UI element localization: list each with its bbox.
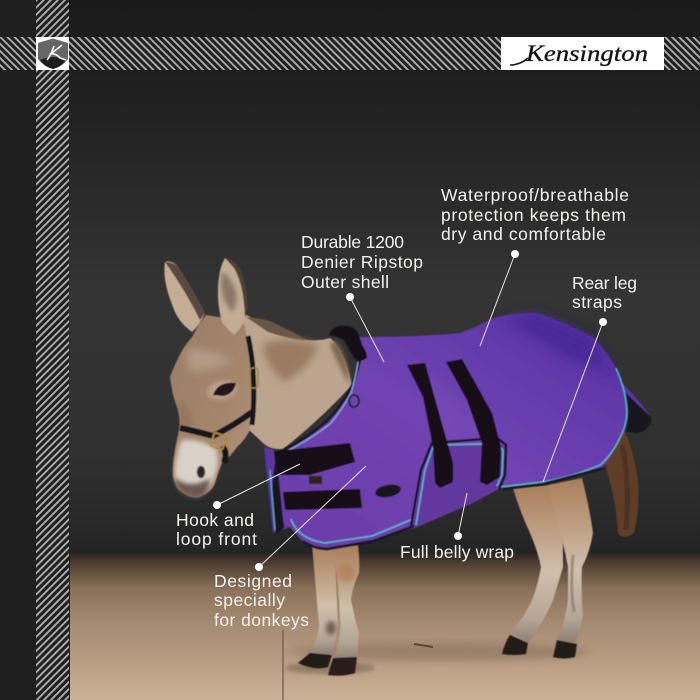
rug shading — [500, 314, 612, 372]
front edge — [264, 447, 288, 533]
callout: rear leg straps — [543, 273, 637, 482]
hind legs — [512, 485, 563, 643]
callout: designed for donkeys: specially — [214, 590, 285, 610]
right ear — [218, 258, 247, 335]
left ear — [164, 261, 205, 332]
callout: designed for donkeys: Designed — [214, 571, 292, 591]
rug body — [265, 313, 627, 548]
rug — [264, 313, 651, 549]
horizontal striped band — [0, 37, 700, 70]
neck — [225, 312, 352, 449]
callout: waterproof: Waterproof/breathable — [441, 185, 629, 205]
callout: designed for donkeys — [214, 466, 366, 630]
neck binding — [280, 360, 360, 452]
front legs — [310, 545, 338, 655]
callout: outer shell: Outer shell — [301, 272, 389, 292]
chest straps — [268, 443, 355, 475]
floor — [70, 552, 700, 700]
floor shadow and marks — [283, 630, 590, 700]
Kensington logo: Kensington — [525, 41, 648, 66]
callout: rear leg straps: straps — [572, 292, 622, 312]
callout: belly wrap: Full belly wrap — [400, 542, 514, 562]
D ring — [349, 395, 359, 407]
hind hooves — [502, 635, 528, 655]
callout: outer shell — [301, 232, 423, 362]
vertical striped band — [36, 0, 69, 700]
halter — [248, 336, 254, 425]
tail — [605, 428, 638, 537]
mane — [246, 317, 306, 341]
callout: outer shell: Denier Ripstop — [301, 252, 423, 272]
muzzle — [175, 440, 218, 492]
left margin — [0, 0, 36, 700]
eye — [205, 377, 239, 403]
callout: waterproof: dry and comfortable — [441, 224, 606, 244]
hem trim — [291, 519, 413, 543]
callout: designed for donkeys: for donkeys — [214, 610, 309, 630]
callout: waterproof: protection keeps them — [441, 205, 626, 225]
brand patch — [374, 483, 402, 499]
callout: belly wrap — [400, 493, 514, 562]
fleece wither pad — [329, 326, 367, 361]
callout: hook and loop — [176, 464, 300, 549]
callout: waterproof — [441, 185, 629, 346]
callout: hook and loop: Hook and — [176, 510, 254, 530]
head — [170, 315, 252, 498]
callout: hook and loop: loop front — [176, 529, 257, 549]
Kensington logo — [501, 37, 664, 70]
belly wrap — [411, 438, 506, 527]
front hooves — [298, 653, 332, 668]
callout: outer shell: Durable 1200 — [301, 232, 404, 252]
donkey — [164, 258, 638, 676]
icon: K shield logo — [36, 37, 69, 70]
callout: rear leg straps: Rear leg — [572, 273, 637, 293]
vertical straps — [407, 363, 453, 488]
rear flap — [623, 387, 651, 433]
